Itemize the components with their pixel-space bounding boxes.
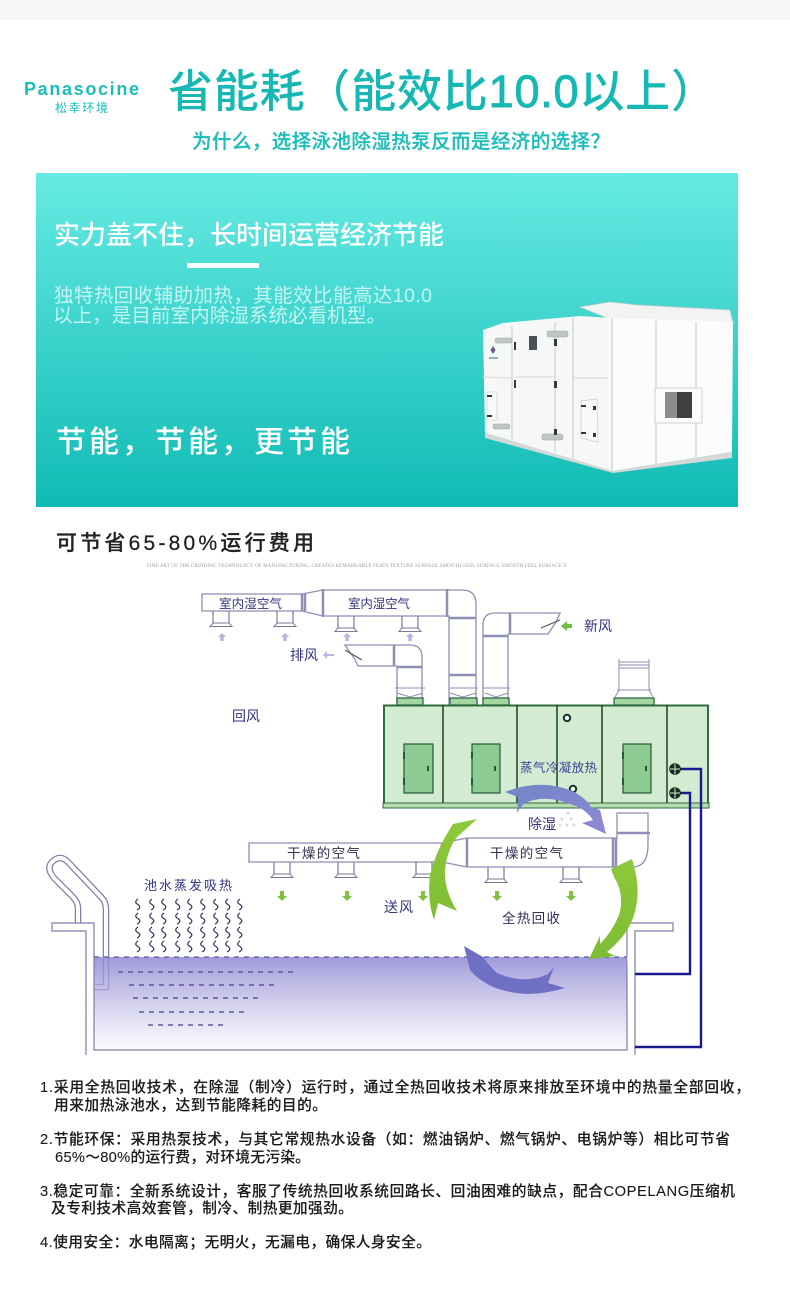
banner underline xyxy=(187,263,259,268)
exhaust air duct: 排风 xyxy=(290,647,318,663)
tiny caption: FINE ART OF THE GRINDING TECHNOLOGY OF MANUFACTURING, CREATES REMARKABLE FEATS TEXTURE SURFACE SMOOTH FEEL SURFACE SMOOTH FEEL SURFACE S xyxy=(147,564,566,569)
indoor humid air ducts: 室内湿空气 xyxy=(219,596,282,611)
item 3 xyxy=(40,1182,735,1217)
ladder xyxy=(49,858,106,987)
pool water and walls xyxy=(49,858,673,1055)
banner paragraph xyxy=(53,285,432,327)
diagram labels xyxy=(384,760,597,926)
icon: air handling unit photo xyxy=(483,302,733,473)
dry air duct: 干燥的空气 xyxy=(287,846,360,861)
diagram: pool dehumidification system xyxy=(49,589,709,1055)
return air label: 回风 xyxy=(232,708,260,724)
arrow: heat recovery right (green) xyxy=(589,859,638,959)
item 4: 4.使用安全：水电隔离；无明火，无漏电，确保人身安全。 xyxy=(40,1233,431,1251)
logo: 松幸环境 xyxy=(55,100,108,115)
evaporation label and steam xyxy=(136,878,242,952)
section heading: 可节省65-80%运行费用 xyxy=(56,532,314,555)
dry air duct: 干燥的空气 xyxy=(490,846,563,861)
arrow: pool water return (purple) xyxy=(464,946,565,994)
text block: benefits list xyxy=(40,1078,750,1251)
indoor humid air ducts: 室内湿空气 xyxy=(348,596,410,611)
arrow: condensation heat (purple) xyxy=(505,785,606,834)
banner paragraph: 以上，是目前室内除湿系统必看机型。 xyxy=(53,305,386,327)
blue water pipes xyxy=(635,763,701,1047)
top grey band xyxy=(0,0,790,20)
item 2: 65%～80%的运行费，对环境无污染。 xyxy=(55,1148,310,1166)
banner paragraph: 独特热回收辅助加热，其能效比能高达10.0 xyxy=(54,285,432,307)
diagram labels: 蒸气冷凝放热 xyxy=(520,760,597,775)
diagram labels: 送风 xyxy=(384,899,413,915)
subtitle: 为什么，选择泳池除湿热泵反而是经济的选择？ xyxy=(192,131,610,153)
indoor humid air ducts xyxy=(202,589,476,705)
exhaust air duct xyxy=(290,645,422,705)
item 2: 2.节能环保：采用热泵技术，与其它常规热水设备（如：燃油锅炉、燃气锅炉、电锅炉等）相比可节省 xyxy=(40,1130,730,1148)
diagram labels: 除湿 xyxy=(528,816,556,832)
banner slogan: 节能，节能，更节能 xyxy=(56,426,350,459)
item 3: 3.稳定可靠：全新系统设计，客服了传统热回收系统回路长、回油困难的缺点，配合COPELANG压缩机 xyxy=(40,1182,735,1200)
fresh air duct xyxy=(483,613,612,705)
item 1: 1.采用全热回收技术，在除湿（制冷）运行时，通过全热回收技术将原来排放至环境中的热量全部回收， xyxy=(40,1078,750,1096)
logo xyxy=(24,79,139,115)
evaporation label and steam: 池水蒸发吸热 xyxy=(144,878,232,893)
fresh air duct: 新风 xyxy=(584,618,612,634)
title: 省能耗（能效比10.0以上） xyxy=(168,66,716,117)
diagram labels: 全热回收 xyxy=(502,910,560,926)
air handling unit xyxy=(383,698,709,808)
duct connectors xyxy=(395,659,653,697)
item 2 xyxy=(40,1130,730,1166)
item 1: 用来加热泳池水，达到节能降耗的目的。 xyxy=(54,1096,327,1114)
dry air duct xyxy=(249,813,650,901)
arrow: heat recovery left (green) xyxy=(429,819,477,920)
item 1 xyxy=(40,1078,750,1114)
banner heading: 实力盖不住，长时间运营经济节能 xyxy=(54,220,444,250)
logo: Panasocine xyxy=(24,79,139,99)
panel: teal banner xyxy=(36,173,738,507)
item 3: 及专利技术高效套管，制冷、制热更加强劲。 xyxy=(51,1199,353,1217)
